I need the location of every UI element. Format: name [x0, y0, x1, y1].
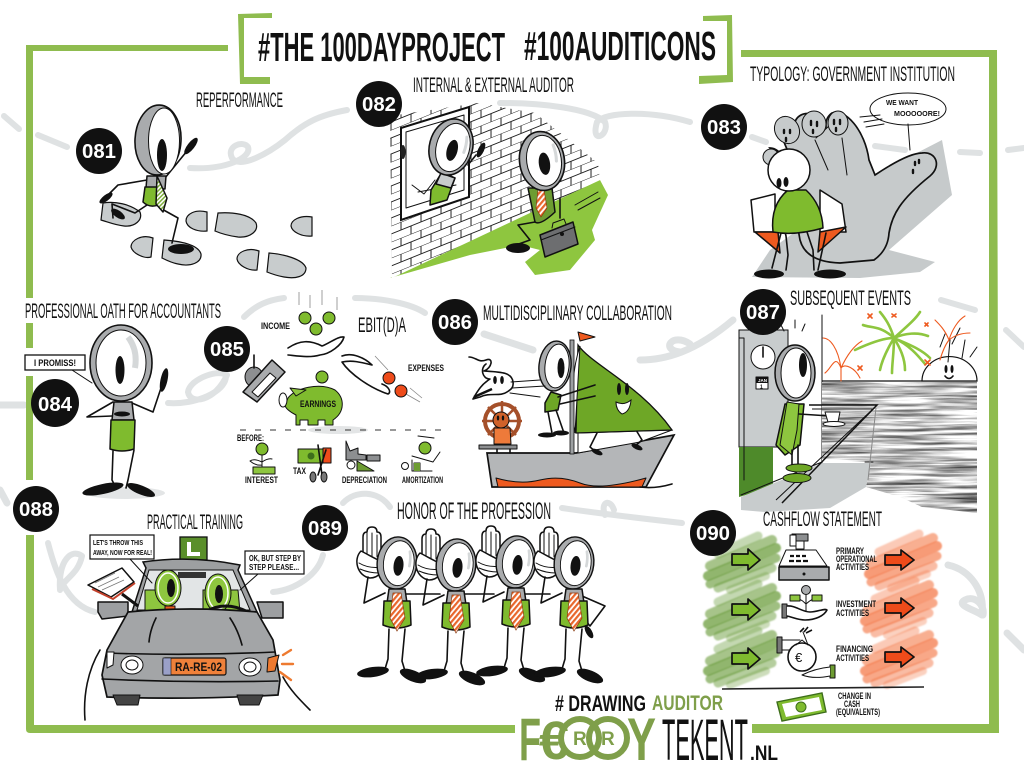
- logo: drawing auditor ferry tekent: [519, 691, 778, 768]
- panel: 082 internal and external auditor: [356, 74, 608, 280]
- logo: drawing auditor ferry tekent: # DRAWING: [555, 691, 646, 716]
- badge 090: [690, 510, 736, 556]
- change in cash label: CHANGE IN: [838, 691, 871, 701]
- envelope and piggy bank: [243, 355, 368, 434]
- speech: instructor: OK, BUT STEP BY: [249, 554, 301, 563]
- speech: learner: AWAY, NOW FOR REAL!: [93, 548, 152, 557]
- badge 089: [302, 505, 348, 551]
- road edges: [85, 650, 310, 720]
- speech: instructor: [240, 551, 304, 590]
- heading: SUBSEQUENT EVENTS: [790, 287, 911, 310]
- labels: [836, 546, 877, 663]
- panel: 083 typology government institution: [701, 63, 955, 278]
- auditor 3: [475, 526, 550, 685]
- sailboat: [487, 332, 674, 488]
- title: #THE 100DAYPROJECT: [258, 24, 505, 70]
- balcony railing: [741, 405, 877, 512]
- badge 090: 090: [696, 523, 730, 545]
- footprints: [101, 202, 312, 278]
- expenses coins and hand: EXPENSES: [408, 363, 444, 373]
- ship wheel: [479, 401, 522, 453]
- money bag with hands: €: [795, 650, 803, 665]
- logo: drawing auditor ferry tekent: .NL: [750, 742, 778, 765]
- auditor 2: [415, 529, 494, 688]
- auditor on deck: [536, 339, 595, 438]
- clock and calendar: [751, 345, 775, 390]
- badge 081: 081: [82, 141, 116, 163]
- logo: drawing auditor ferry tekent: AUDITOR: [652, 692, 723, 715]
- badge 083: [701, 104, 747, 150]
- panel: 090 cashflow statement: [690, 508, 937, 721]
- badge 084: [31, 379, 79, 427]
- cloud blowing wind: [469, 357, 545, 399]
- orange sparks: [280, 650, 293, 680]
- banknote: [777, 693, 826, 721]
- clock and calendar: 1: [760, 384, 763, 390]
- auditor running: [98, 104, 200, 254]
- summary line: [722, 687, 924, 689]
- panel: 087 subsequent events: [739, 287, 978, 515]
- title: #100AUDITICONS: [524, 23, 716, 69]
- auditor with coffee: [775, 320, 845, 482]
- panel: 081 reperformance: [76, 89, 312, 278]
- badge 087: [740, 289, 786, 335]
- number plate: [163, 658, 226, 675]
- panel: 089 honor of the profession: [302, 498, 605, 688]
- before items: DEPRECIATION: [342, 475, 387, 485]
- hand with faces: [763, 111, 936, 263]
- money bag with hands: [777, 627, 835, 678]
- before items: INTEREST: [245, 475, 278, 485]
- badge 088: [13, 486, 59, 532]
- speech bubble: [860, 93, 946, 150]
- panel: 089 honor of the profession: HONOR OF THE PROFESSION: [397, 498, 551, 525]
- panel: 081 reperformance: REPERFORMANCE: [196, 89, 283, 112]
- title bracket: [238, 13, 733, 84]
- speech: instructor: STEP PLEASE...: [249, 563, 299, 572]
- panel: 088 practical training: [13, 486, 310, 720]
- panel: 086 multidisciplinary collaboration: [432, 299, 674, 488]
- speech label: [25, 355, 92, 383]
- change in cash label: (EQUIVALENTS): [836, 707, 880, 717]
- dashed divider: [240, 429, 445, 431]
- number plate: RA-RE-02: [175, 660, 222, 674]
- horizon: [822, 380, 977, 382]
- badge 083: 083: [707, 117, 741, 139]
- window with internal auditor: [400, 107, 487, 220]
- auditor 1: [356, 527, 440, 686]
- badge 084: 084: [38, 394, 73, 416]
- clock and calendar: JAN: [758, 378, 767, 383]
- badge 088: 088: [19, 499, 53, 521]
- labels: FINANCING: [836, 644, 873, 654]
- text: MULTIDISCIPLINARY COLLABORATION: [483, 302, 672, 325]
- badge 085: [204, 326, 250, 372]
- panel: 084 professional oath: [25, 300, 221, 500]
- car: [98, 559, 283, 705]
- labels: ACTIVITIES: [836, 653, 869, 663]
- before items: TAX: [293, 466, 306, 476]
- expenses coins and hand: [342, 355, 444, 402]
- auditor taking oath: [81, 325, 170, 500]
- income coins and hand: [261, 290, 344, 357]
- badge 087: 087: [746, 302, 780, 324]
- labels: PRIMARY: [836, 546, 864, 556]
- labels: OPERATIONAL: [836, 554, 877, 564]
- before items: AMORTIZATION: [402, 475, 443, 485]
- envelope and piggy bank: EARNINGS: [300, 399, 336, 409]
- scribble backgrounds: [708, 534, 937, 685]
- change in cash label: CASH: [844, 699, 860, 709]
- green arrows: [732, 549, 760, 669]
- change in cash label: [836, 691, 880, 717]
- cash register: [779, 534, 829, 580]
- badge 082: 082: [362, 94, 396, 116]
- hand shadow: [752, 140, 952, 278]
- auditor 4: [533, 527, 605, 686]
- orange arrows: [885, 550, 914, 667]
- before items: BEFORE:: [237, 433, 264, 443]
- speech: learner: [90, 535, 154, 583]
- ground: [390, 180, 608, 278]
- L sign: [180, 537, 207, 560]
- panel: 082 internal and external auditor: INTERNAL & EXTERNAL AUDITOR: [413, 74, 574, 97]
- text: PROFESSIONAL OATH FOR ACCOUNTANTS: [25, 300, 221, 323]
- income coins and hand: INCOME: [261, 321, 290, 331]
- panel: 090 cashflow statement: CASHFLOW STATEMENT: [763, 508, 882, 531]
- labels: ACTIVITIES: [836, 562, 869, 572]
- speech label: I PROMISS!: [34, 358, 76, 369]
- door panel: [739, 315, 822, 497]
- badge 082: [356, 81, 402, 127]
- panel: 088 practical training: PRACTICAL TRAINING: [147, 511, 243, 534]
- speech: learner: LET'S THROW THIS: [93, 538, 143, 547]
- fireworks: [823, 312, 970, 381]
- book: [88, 568, 138, 606]
- hand with growing plant: [782, 586, 827, 620]
- labels: INVESTMENT: [836, 599, 876, 609]
- external auditor with briefcase: [506, 129, 600, 257]
- before items: [237, 433, 443, 485]
- logo: drawing auditor ferry tekent: R: [601, 729, 615, 750]
- badge 089: 089: [308, 518, 342, 540]
- badge 085: 085: [210, 339, 244, 361]
- brick wall: [385, 100, 605, 280]
- speech bubble: MOOOOORE!: [894, 109, 940, 118]
- panel: 085 EBIT(D)A: [204, 290, 445, 485]
- badge 086: 086: [438, 312, 472, 334]
- heading: EBIT(D)A: [358, 314, 406, 337]
- badge 086: [432, 299, 478, 345]
- logo: drawing auditor ferry tekent: R: [573, 729, 587, 750]
- badge 081: [76, 128, 122, 174]
- sea: [822, 382, 978, 515]
- figure with empty pockets: [751, 149, 846, 278]
- labels: ACTIVITIES: [836, 608, 869, 618]
- sun with face: [922, 328, 977, 381]
- speech bubble: WE WANT: [886, 98, 918, 107]
- background: grey swoosh line: [0, 103, 1024, 650]
